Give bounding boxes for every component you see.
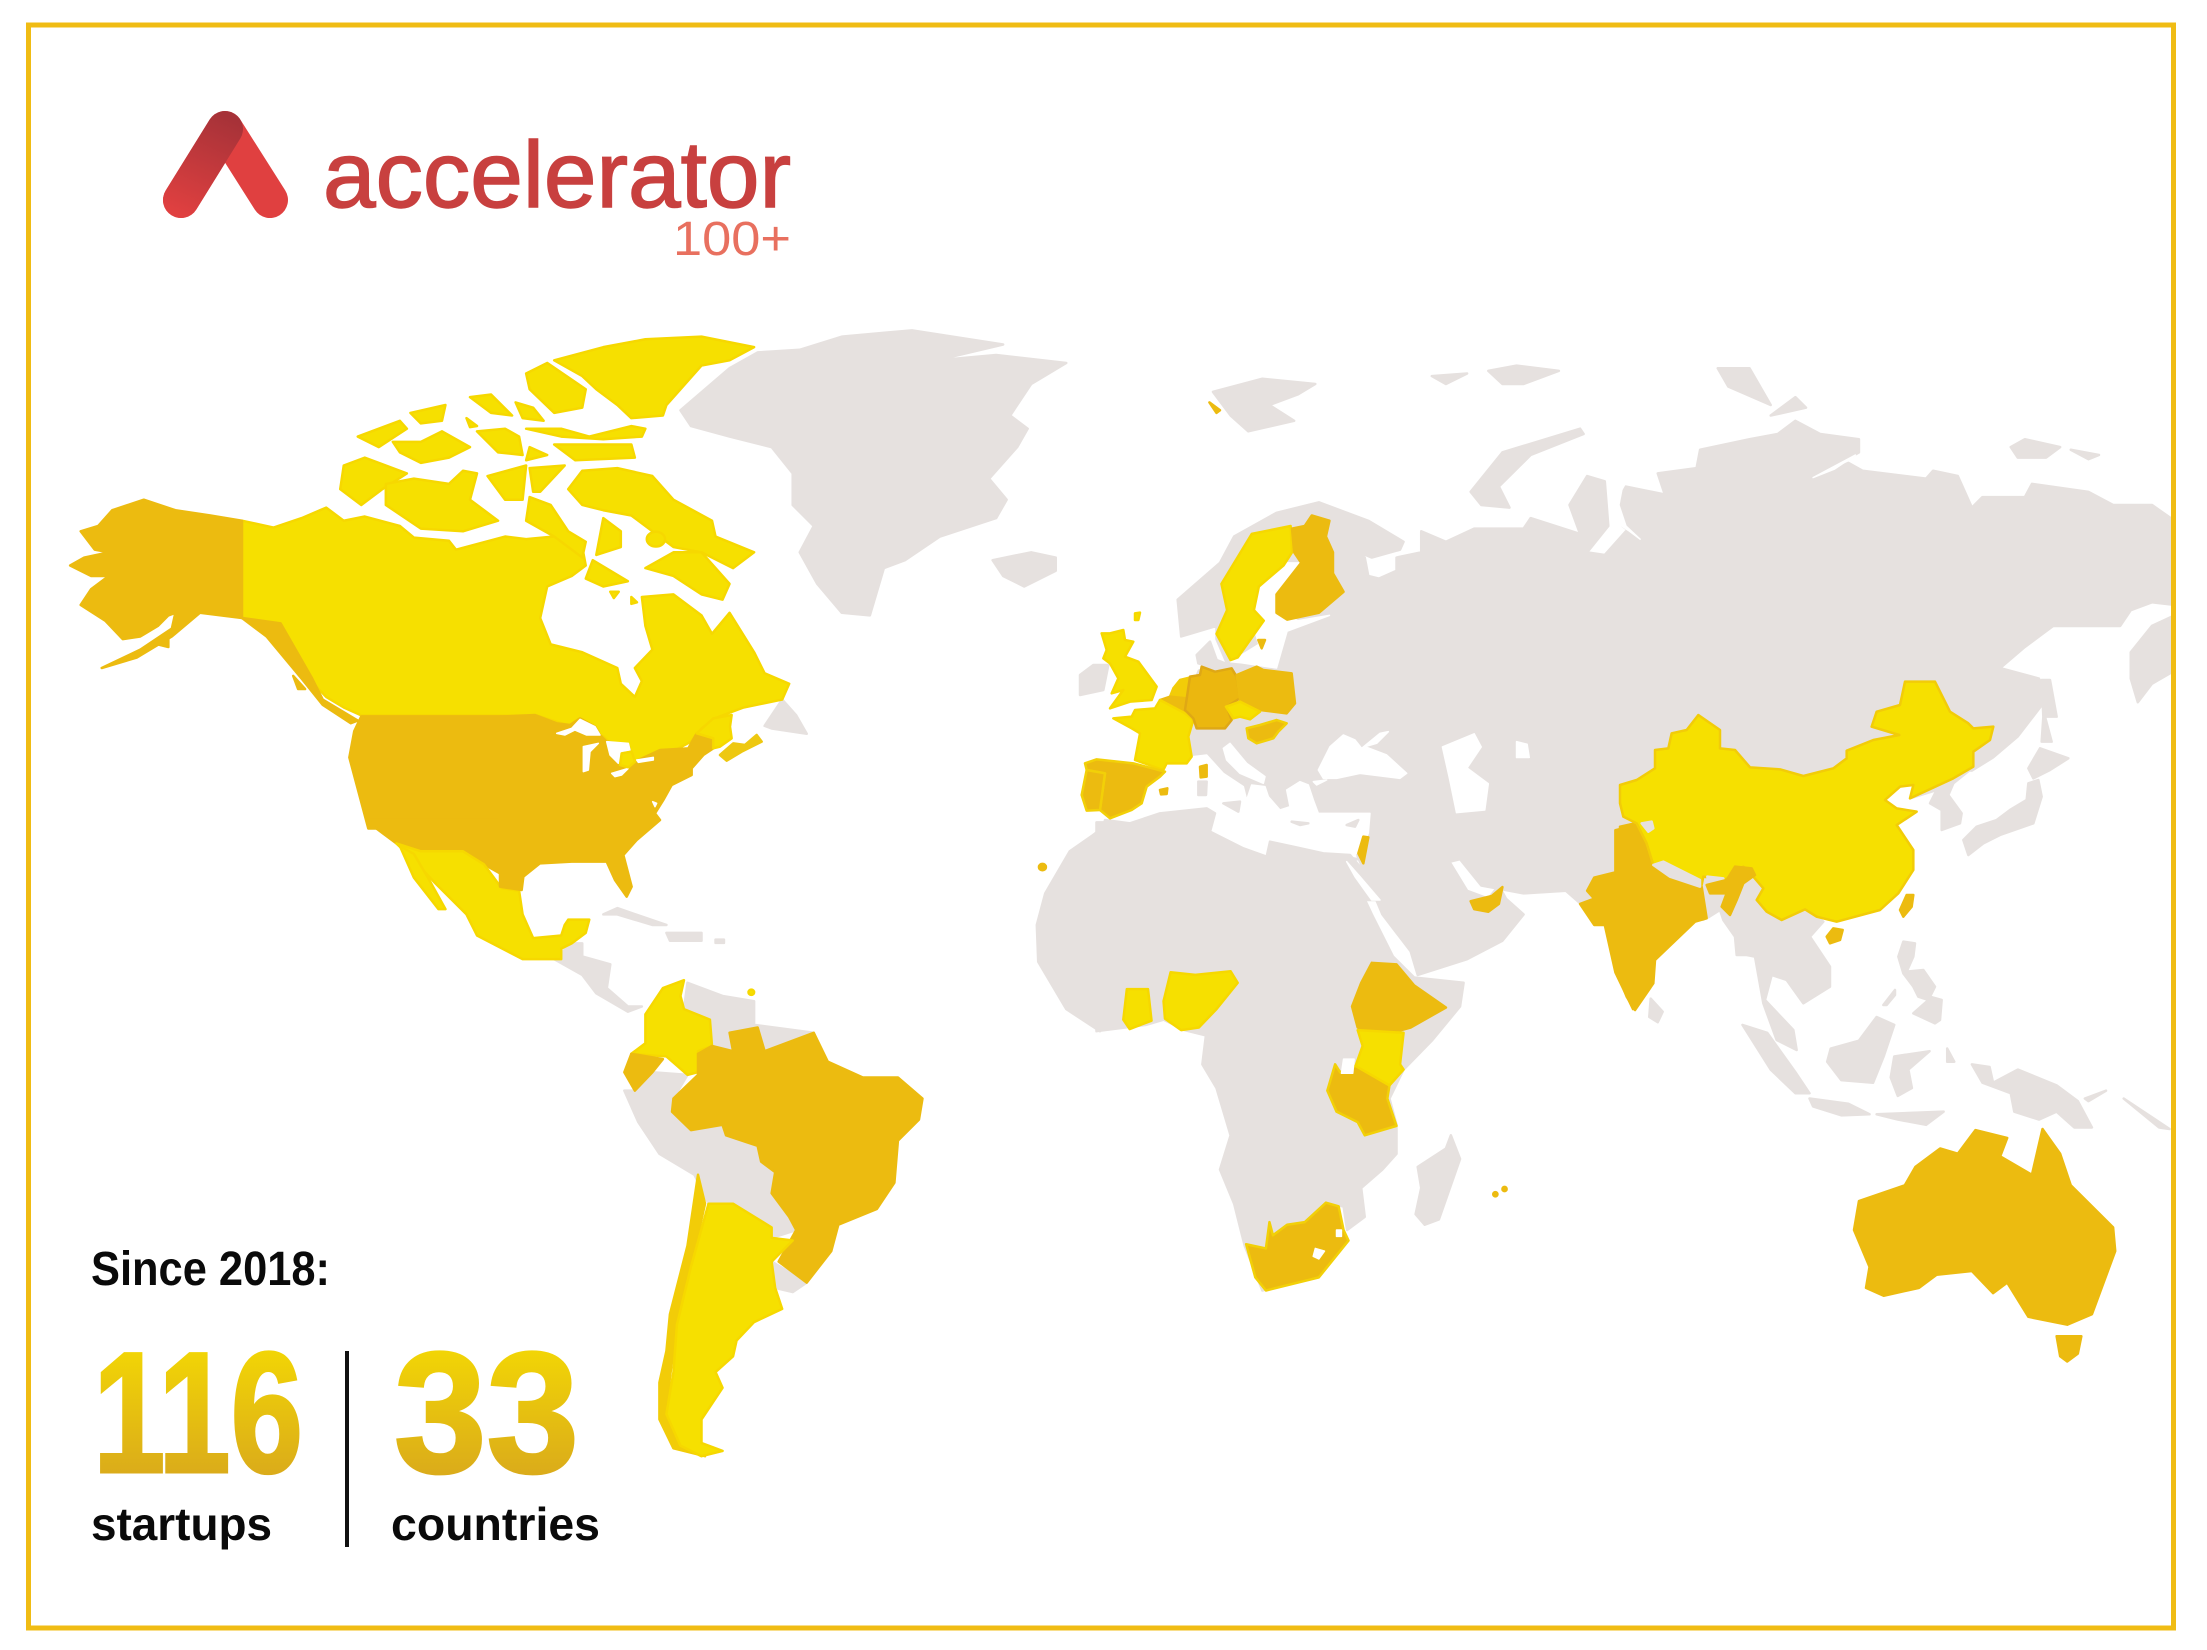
divider — [345, 1351, 349, 1547]
countries: Africa, India, Australia — [1123, 828, 2115, 1362]
island: Mallorca — [1160, 788, 1167, 794]
stat: 33 countries: countries — [391, 1498, 600, 1550]
country: USA south-west — [368, 817, 523, 880]
country: Kenya — [1356, 1030, 1404, 1085]
country: UAE — [1471, 887, 1502, 912]
icon: logo chevron — [181, 129, 270, 200]
province: New Brunswick — [697, 715, 732, 748]
country: Mauritius — [1493, 1187, 1507, 1196]
Lesotho — [1313, 1248, 1325, 1259]
land: South-East Asia, Korea, Japan, Philippines — [1702, 680, 2068, 1050]
country: Ethiopia — [1352, 963, 1446, 1035]
map: world map — [70, 330, 2175, 1456]
land: Eurasia — [1178, 366, 2175, 831]
country: Finland — [1276, 515, 1344, 620]
country: Bhutan — [1707, 877, 1723, 883]
country: India west — [1580, 828, 1647, 1009]
Lake Victoria — [1341, 1059, 1354, 1073]
country: Australia — [1854, 1129, 2115, 1362]
country: Mexico — [396, 843, 589, 959]
country: Canada — [242, 337, 789, 763]
countries: Americas south — [368, 817, 1046, 1456]
stat: 116 startups: 116 — [93, 1317, 303, 1509]
country: Curacao — [749, 990, 754, 995]
country: Portugal — [1082, 770, 1105, 811]
country: Aksai Chin gap — [1642, 822, 1653, 832]
country: Sweden — [1216, 526, 1292, 660]
country: Czechia — [1226, 702, 1260, 719]
country: USA west — [349, 716, 523, 828]
countries: Nordics — [1209, 402, 1344, 660]
countries: Western Europe — [1082, 613, 1368, 863]
country: Taiwan — [1900, 895, 1913, 917]
province: Nova Scotia — [720, 735, 762, 761]
island: Corsica — [1200, 765, 1207, 777]
land: Africa, Arabia, Madagascar, Indonesia, New Guinea — [1096, 822, 2170, 1291]
country: Alaska — [70, 500, 358, 723]
stat: 116 startups — [91, 1317, 303, 1550]
country: Ghana — [1123, 989, 1152, 1029]
countries: eastern USA and Maritimes — [500, 715, 762, 897]
stat: 33 countries: 33 — [394, 1317, 579, 1509]
country: India north-east — [1707, 867, 1755, 915]
country: Argentina — [666, 1204, 793, 1456]
country: France — [1113, 700, 1193, 770]
country: Poland — [1237, 667, 1295, 713]
Great Lakes — [557, 719, 657, 807]
country: China — [1620, 682, 1993, 922]
logo wordmark: accelerator — [323, 122, 791, 227]
stats block — [91, 1243, 600, 1550]
country: Belgium — [1160, 697, 1187, 713]
country: Colombia — [631, 980, 712, 1075]
country: Hungary — [1247, 720, 1287, 743]
country: Israel — [1358, 837, 1368, 863]
country: India east — [1620, 823, 1707, 1010]
country: Chile — [659, 1175, 705, 1456]
country: Germany — [1185, 667, 1240, 728]
country: Spain — [1085, 759, 1165, 818]
country: South Africa — [1246, 1203, 1349, 1291]
country: Ecuador — [624, 1054, 663, 1091]
country: Nigeria — [1164, 971, 1238, 1030]
countries: Canada and Alaska — [70, 337, 789, 828]
land: Greenland, Iceland, Newfoundland — [680, 330, 1066, 734]
country: Hainan — [1827, 928, 1843, 943]
seas and land: Mediterranean, North Africa, Black Sea — [1060, 642, 1407, 900]
Eswatini — [1337, 1230, 1341, 1236]
country: Netherlands — [1170, 677, 1191, 697]
country: Svalbard mark — [1209, 402, 1220, 413]
logo suffix: 100+ — [673, 213, 791, 266]
island: Gotland — [1258, 640, 1265, 648]
country: Nepal — [1653, 862, 1700, 887]
island: Canary — [1039, 864, 1046, 870]
country: Brazil — [672, 1028, 922, 1283]
logo: accelerator 100+ — [181, 122, 791, 266]
country: United Kingdom — [1102, 613, 1157, 708]
country: Tanzania — [1327, 1064, 1397, 1135]
countries: China and eastern India — [1620, 682, 1993, 1010]
province: Ontario peninsula — [620, 752, 635, 767]
land: West Africa, Central America, Caribbean, South America grey — [554, 830, 1100, 1455]
stat: 116 startups: startups — [91, 1498, 272, 1550]
heading: since 2018: Since 2018: — [91, 1243, 330, 1296]
country: USA east — [500, 715, 713, 897]
